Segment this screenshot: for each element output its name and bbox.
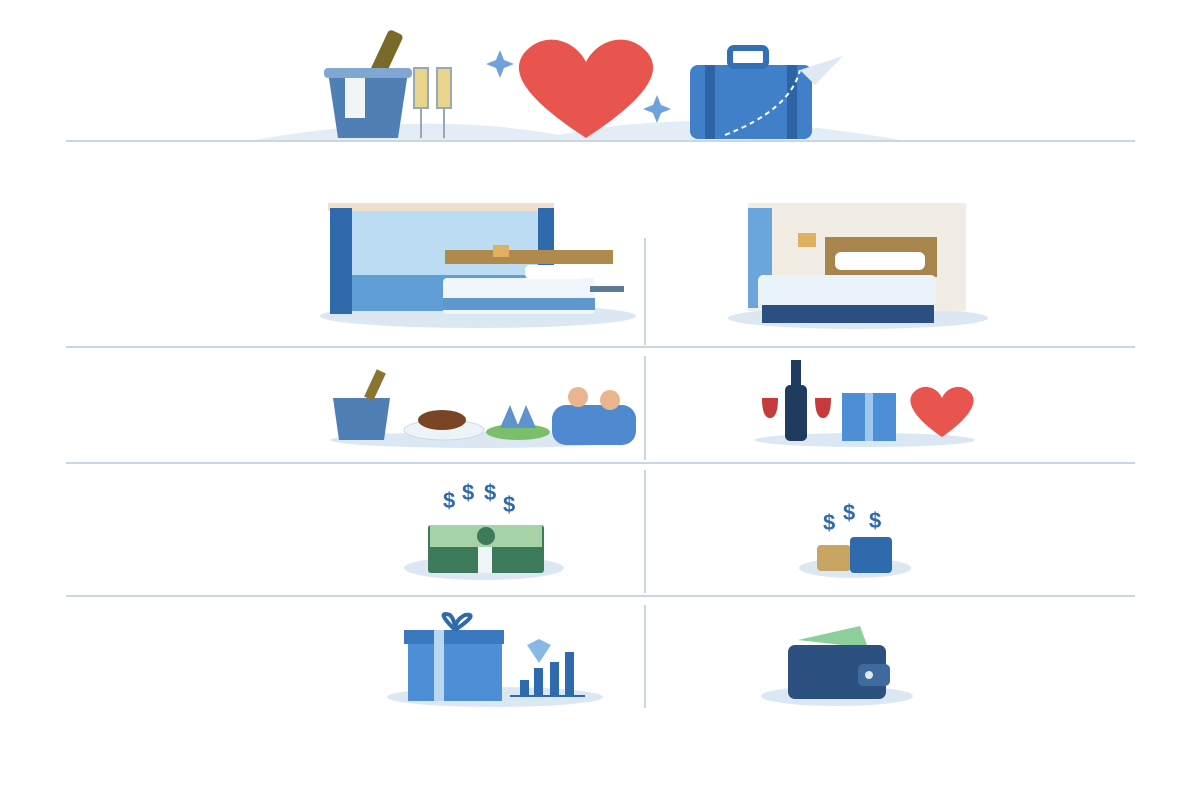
row 1 left: ocean view room [320, 203, 636, 328]
icon: champagne bucket [324, 29, 412, 138]
row 3 left: cash stack: $ [462, 480, 474, 505]
icon: heart [486, 40, 671, 138]
row 3 right: coins [799, 500, 911, 578]
row 3 left: cash stack: $ [503, 492, 515, 517]
icon: suitcase [690, 48, 843, 139]
row 3 left: cash stack [404, 480, 564, 580]
row 1 right: standard room [728, 203, 988, 329]
row 3 right: coins: $ [843, 500, 855, 525]
row 3 right: coins: $ [823, 510, 835, 535]
row 2 right: wine gift heart [755, 360, 975, 447]
icon: glasses [414, 68, 451, 138]
row 3 left: cash stack: $ [443, 488, 455, 513]
header illustration [255, 29, 900, 140]
row 2 left: amenities [330, 369, 636, 448]
row 4 left: gift and chart [387, 614, 603, 707]
row 4 right: wallet [761, 626, 913, 706]
row 3 left: cash stack: $ [484, 480, 496, 505]
row 3 right: coins: $ [869, 508, 881, 533]
